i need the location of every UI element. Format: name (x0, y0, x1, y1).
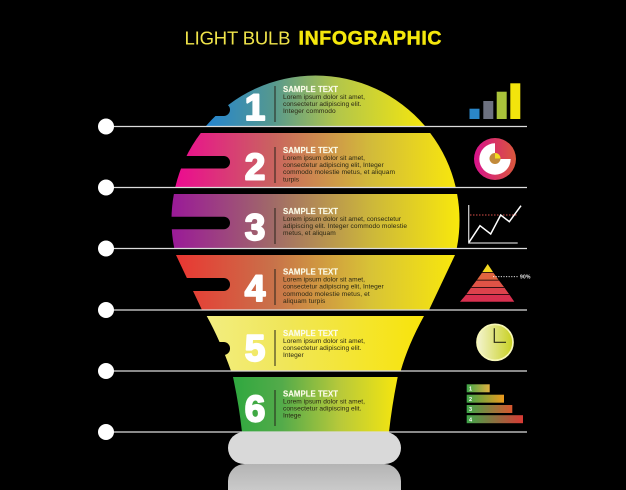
number 5: 5 (245, 328, 265, 369)
number 2: 2 (245, 146, 265, 188)
icon: stepped bars: 4 (469, 417, 473, 423)
text block 6: consectetur adipiscing elit. (283, 406, 362, 413)
icon: stepped bars: 2 (469, 397, 472, 403)
bulb base (228, 432, 401, 490)
text block 3: adipiscing elit. Integer commodo molestie (283, 223, 407, 230)
icon: pyramid: 90% (520, 274, 531, 280)
text block 4: aliquam turpis (283, 298, 326, 305)
text block 1: Integer commodo (283, 108, 336, 115)
text block 2: SAMPLE TEXT (283, 146, 338, 155)
number 6: 6 (245, 388, 265, 430)
title (184, 28, 442, 50)
leader lines with dots (98, 118, 527, 440)
text block 4: commodo molestie metus, et (283, 291, 370, 298)
text block 5 (283, 329, 365, 359)
text block 6: Lorem ipsum dolor sit amet, (283, 398, 365, 406)
title: LIGHT BULB (184, 28, 290, 48)
text block 1: Lorem ipsum dolor sit amet, (283, 94, 365, 101)
text block 3 (283, 207, 407, 237)
number 1: 1 (245, 87, 265, 128)
text block 2: commodo molestie metus, et aliquam (283, 169, 396, 176)
text block 2 (283, 146, 396, 183)
text block 3: SAMPLE TEXT (283, 207, 338, 216)
text block 1: SAMPLE TEXT (283, 85, 338, 94)
text block 3: Lorem ipsum dolor sit amet, consectetur (283, 216, 402, 223)
text block 6 (283, 390, 365, 420)
icon: stepped bars (467, 384, 523, 423)
text block 4 (283, 268, 384, 305)
text block 5: SAMPLE TEXT (283, 329, 338, 338)
panel: band 1 (180, 76, 425, 128)
text block 1 (283, 85, 365, 115)
text block 2: Lorem ipsum dolor sit amet, (283, 155, 365, 162)
panel: band 4 (160, 255, 455, 310)
text block 6: Intege (283, 413, 301, 420)
icon: stepped bars: 1 (469, 386, 472, 392)
title: INFOGRAPHIC (298, 28, 442, 50)
panel: band 2 (160, 133, 456, 188)
icon: stepped bars: 3 (469, 407, 472, 413)
text block 5: consectetur adipiscing elit. (283, 345, 362, 352)
icon: bar chart (470, 83, 520, 119)
panel: band 3 (160, 194, 460, 248)
text block 4: Lorem ipsum dolor sit amet, (283, 277, 365, 284)
text block 3: metus, et aliquam (283, 230, 336, 237)
text block 5: Lorem ipsum dolor sit amet, (283, 338, 365, 345)
panel: band 6 (233, 377, 398, 432)
text block 4: SAMPLE TEXT (283, 268, 338, 277)
number 3: 3 (245, 207, 265, 248)
icon: donut chart (474, 138, 516, 180)
icon: pyramid (460, 264, 531, 302)
icon: clock (477, 324, 513, 360)
number 4: 4 (245, 268, 266, 309)
icon: line chart (469, 205, 521, 243)
text block 2: turpis (283, 176, 300, 183)
text block 5: Integer (283, 352, 304, 359)
text block 4: consectetur adipiscing elit, Integer (283, 284, 384, 291)
text block 1: consectetur adipiscing elit. (283, 101, 362, 108)
text block 6: SAMPLE TEXT (283, 390, 338, 398)
text block 2: consectetur adipiscing elit, Integer (283, 162, 384, 169)
panel: band 5 (200, 316, 424, 371)
